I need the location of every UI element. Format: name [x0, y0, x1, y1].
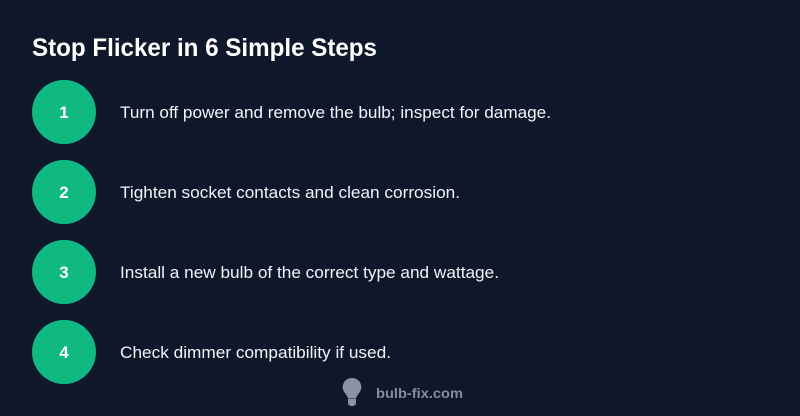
icon: light bulb — [343, 378, 361, 406]
step 1: 1 — [59, 103, 69, 122]
step 2: Tighten socket contacts and clean corrosion. — [120, 183, 460, 202]
step 4 — [32, 320, 391, 384]
footer text: bulb-fix.com — [376, 385, 463, 401]
step 1 — [32, 80, 551, 144]
footer brand — [343, 378, 463, 406]
step 2: 2 — [59, 183, 69, 202]
step 2 — [32, 160, 460, 224]
step 1: Turn off power and remove the bulb; inspect for damage. — [120, 103, 551, 122]
step 4: Check dimmer compatibility if used. — [120, 343, 391, 362]
step 4: 4 — [59, 343, 69, 362]
step 3: 3 — [59, 263, 69, 282]
step 3 — [32, 240, 499, 304]
title: Stop Flicker in 6 Simple Steps — [32, 34, 377, 62]
step 3: Install a new bulb of the correct type and wattage. — [120, 263, 499, 282]
